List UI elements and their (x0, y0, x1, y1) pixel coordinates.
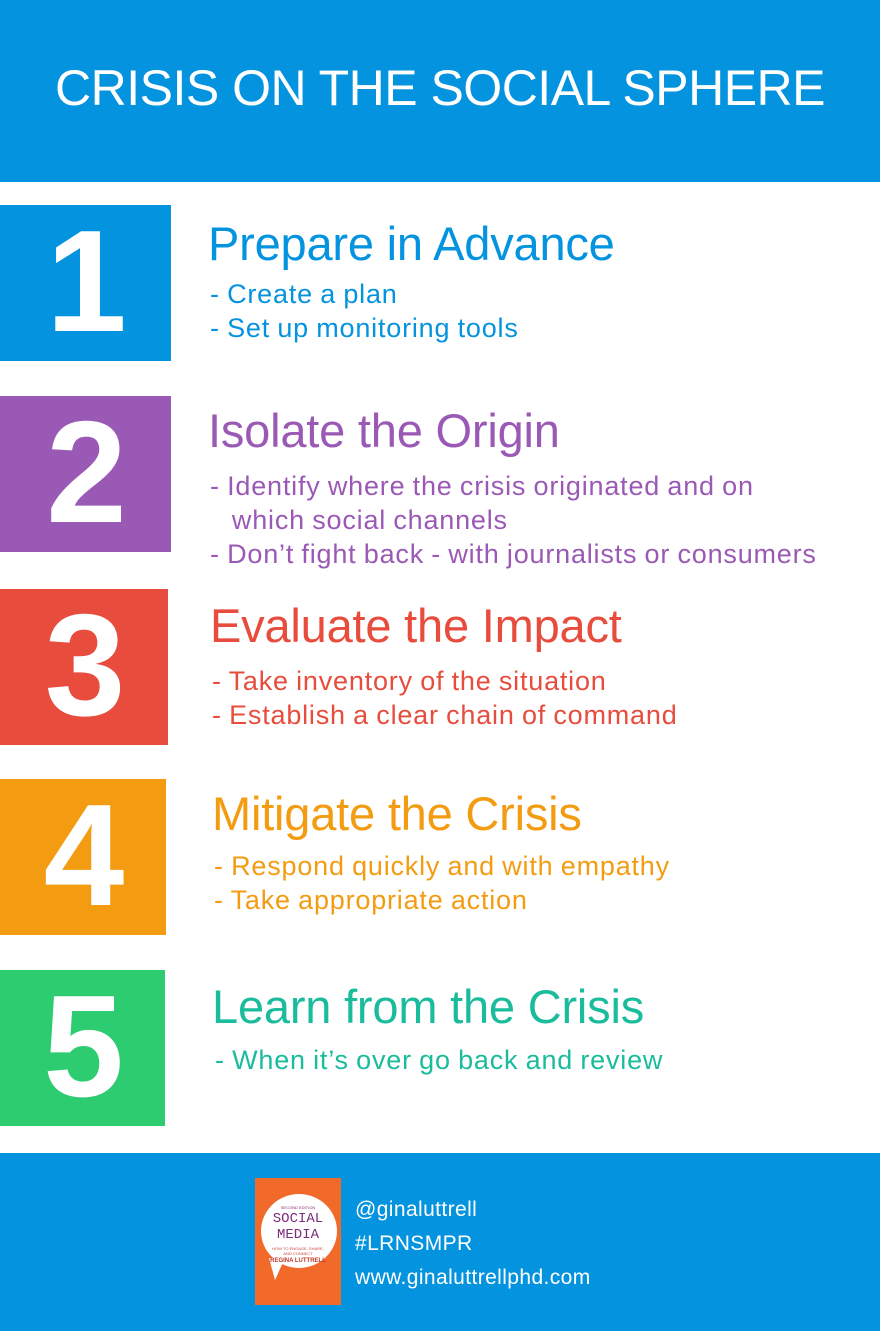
contact info: www.ginaluttrellphd.com (355, 1266, 591, 1289)
bullets 4: - Take appropriate action (214, 885, 528, 915)
heading 1: Prepare in Advance (208, 217, 615, 270)
bullets 2: - Don’t fight back - with journalists or consumers (210, 539, 817, 569)
book cover: AND CONNECT (283, 1251, 313, 1256)
bullets 4: - Respond quickly and with empathy (214, 851, 670, 881)
book cover: SOCIAL (273, 1211, 323, 1227)
bullets 2: which social channels (232, 505, 508, 535)
panel: step 4 (0, 774, 670, 936)
title: CRISIS ON THE SOCIAL SPHERE (55, 60, 825, 116)
bullets 1 (210, 279, 519, 343)
number box 5: 5 (43, 965, 122, 1127)
panel: step 5 (0, 965, 663, 1127)
number box 4: 4 (44, 774, 122, 936)
bullets 4 (214, 851, 670, 915)
number box 3 (0, 589, 168, 745)
bullets 3: - Establish a clear chain of command (212, 700, 678, 730)
number box 1: 1 (46, 200, 125, 362)
panel: step 3 (0, 584, 678, 746)
book cover: SECOND EDITION (281, 1205, 315, 1210)
number box 2 (0, 396, 171, 552)
heading 3: Evaluate the Impact (210, 599, 622, 652)
book cover: HOW TO ENGAGE, SHARE, (272, 1246, 324, 1251)
number box 4 (0, 779, 166, 935)
book cover: REGINA LUTTRELL (270, 1258, 326, 1264)
book cover: MEDIA (277, 1227, 319, 1243)
panel: step 1 (0, 200, 615, 362)
header (0, 0, 880, 182)
contact info: #LRNSMPR (355, 1232, 473, 1255)
contact info: @ginaluttrell (355, 1198, 477, 1221)
bullets 5: - When it’s over go back and review (215, 1045, 663, 1075)
number box 5 (0, 970, 165, 1126)
number box 1 (0, 205, 171, 361)
bullets 1: - Create a plan (210, 279, 398, 309)
book cover (255, 1178, 341, 1305)
bullets 2: - Identify where the crisis originated and on (210, 471, 754, 501)
number box 3: 3 (45, 584, 123, 746)
heading 5: Learn from the Crisis (212, 980, 644, 1033)
number box 2: 2 (46, 391, 125, 553)
bullets 3 (212, 666, 678, 730)
bullets 2 (210, 471, 817, 569)
footer (0, 1153, 880, 1331)
bullets 1: - Set up monitoring tools (210, 313, 519, 343)
bullets 3: - Take inventory of the situation (212, 666, 607, 696)
contact info (355, 1198, 591, 1289)
heading 2: Isolate the Origin (208, 404, 560, 457)
heading 4: Mitigate the Crisis (212, 787, 582, 840)
panel: step 2 (0, 391, 817, 569)
